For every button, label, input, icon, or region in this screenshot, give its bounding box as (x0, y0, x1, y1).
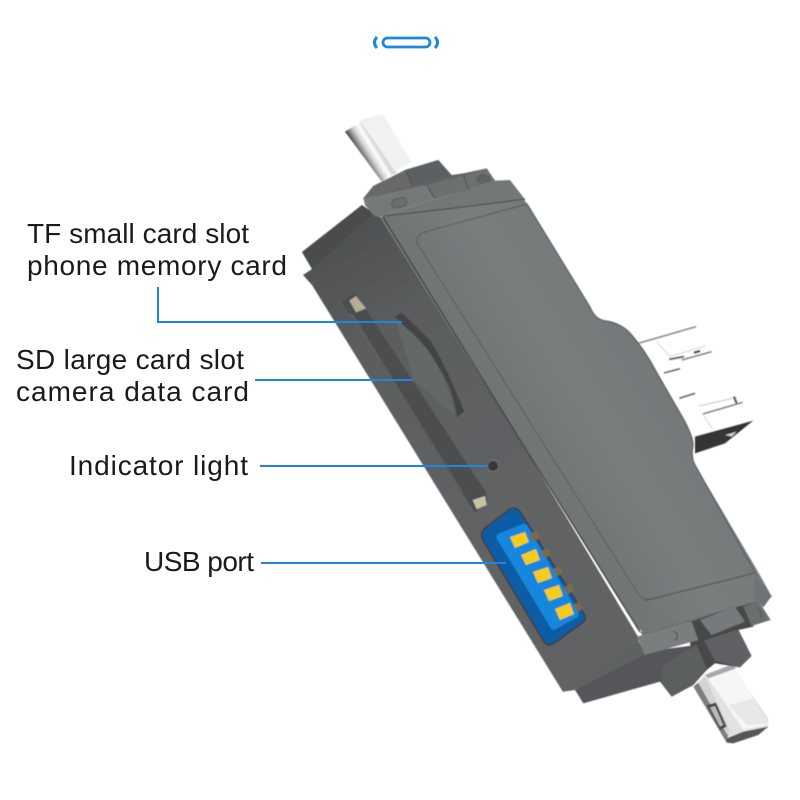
USB rear contacts (530, 531, 583, 612)
USB tongue (496, 524, 579, 630)
USB port (482, 508, 585, 645)
inner front panel (417, 204, 755, 599)
leader line: USB port (261, 562, 506, 564)
USB gold contacts (510, 532, 574, 620)
top end cap (363, 160, 525, 217)
indicator light (486, 460, 500, 472)
bottom end tabs (688, 599, 771, 685)
leader line: TF slot (158, 287, 402, 322)
connector: Lightning plug (693, 664, 768, 743)
leader line: indicator light (260, 465, 487, 467)
tab with oval mark (637, 622, 698, 655)
bottom body edge (563, 637, 707, 703)
leader line: SD slot (255, 379, 413, 381)
label: USB port: USB port (144, 546, 254, 577)
side face with ports (302, 205, 640, 692)
front face (380, 199, 772, 632)
label: TF small card slot: TF small card slot (27, 218, 249, 249)
bottom lip band (637, 573, 772, 655)
SD card slot (342, 293, 487, 513)
label: camera data card: camera data card (16, 376, 249, 407)
label: Indicator light: Indicator light (69, 450, 248, 481)
icon: USB-C port symbol (374, 37, 438, 48)
device: card reader adapter (302, 114, 772, 743)
connector: micro USB plug (638, 327, 753, 453)
connector: USB-C plug (345, 114, 412, 182)
label: phone memory card: phone memory card (27, 250, 287, 281)
label: SD large card slot: SD large card slot (16, 344, 244, 375)
TF card slot (395, 312, 464, 417)
